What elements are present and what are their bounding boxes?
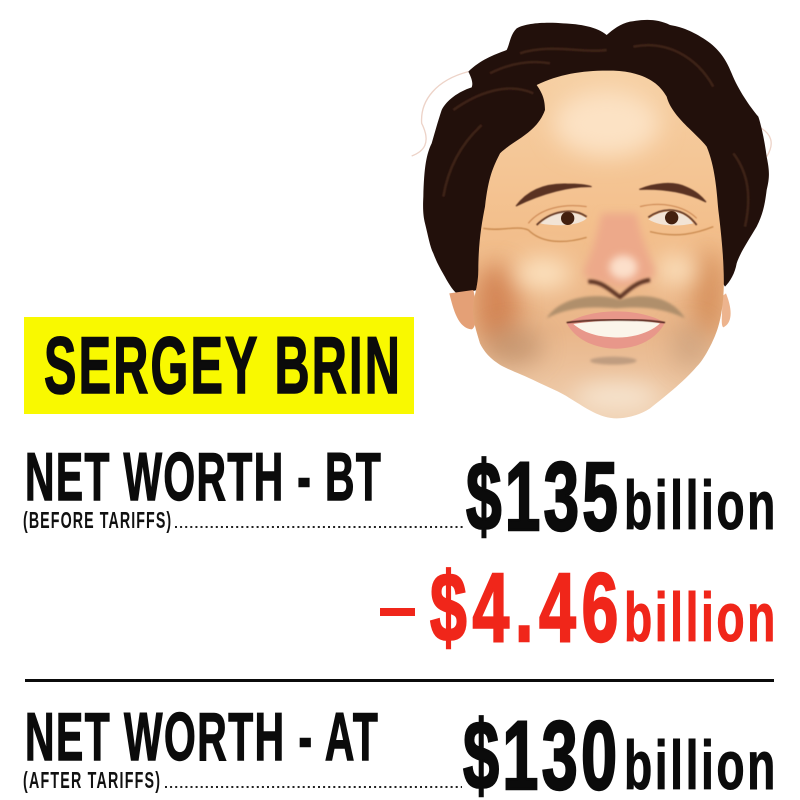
before tariffs row: (BEFORE TARIFFS) (23, 509, 171, 534)
before tariffs row: $135 (466, 444, 618, 551)
ears (449, 290, 476, 329)
before tariffs row (23, 438, 775, 551)
hair (423, 20, 769, 295)
tariff loss row (380, 553, 775, 662)
divider (25, 679, 774, 682)
after tariffs row (23, 698, 775, 800)
before tariffs row: billion (624, 468, 775, 544)
eyebrows (516, 183, 706, 206)
nose (584, 213, 655, 297)
face (473, 71, 724, 418)
stubble moustache (547, 296, 685, 318)
hair highlights (443, 45, 748, 227)
after tariffs row: (AFTER TARIFFS) (23, 769, 160, 794)
eyes (528, 204, 697, 225)
chin stubble (590, 357, 637, 365)
facial shading (473, 90, 725, 410)
stray hair wisps (412, 72, 771, 157)
tariff loss row: $4.46 (430, 553, 618, 662)
name label: SERGEY BRIN (44, 321, 400, 411)
mouth (567, 311, 665, 349)
illustration: portrait of Sergey Brin (412, 20, 771, 418)
tariff loss row: billion (624, 580, 775, 656)
before tariffs row: NET WORTH - BT (25, 438, 381, 515)
after tariffs row: NET WORTH - AT (25, 698, 378, 775)
